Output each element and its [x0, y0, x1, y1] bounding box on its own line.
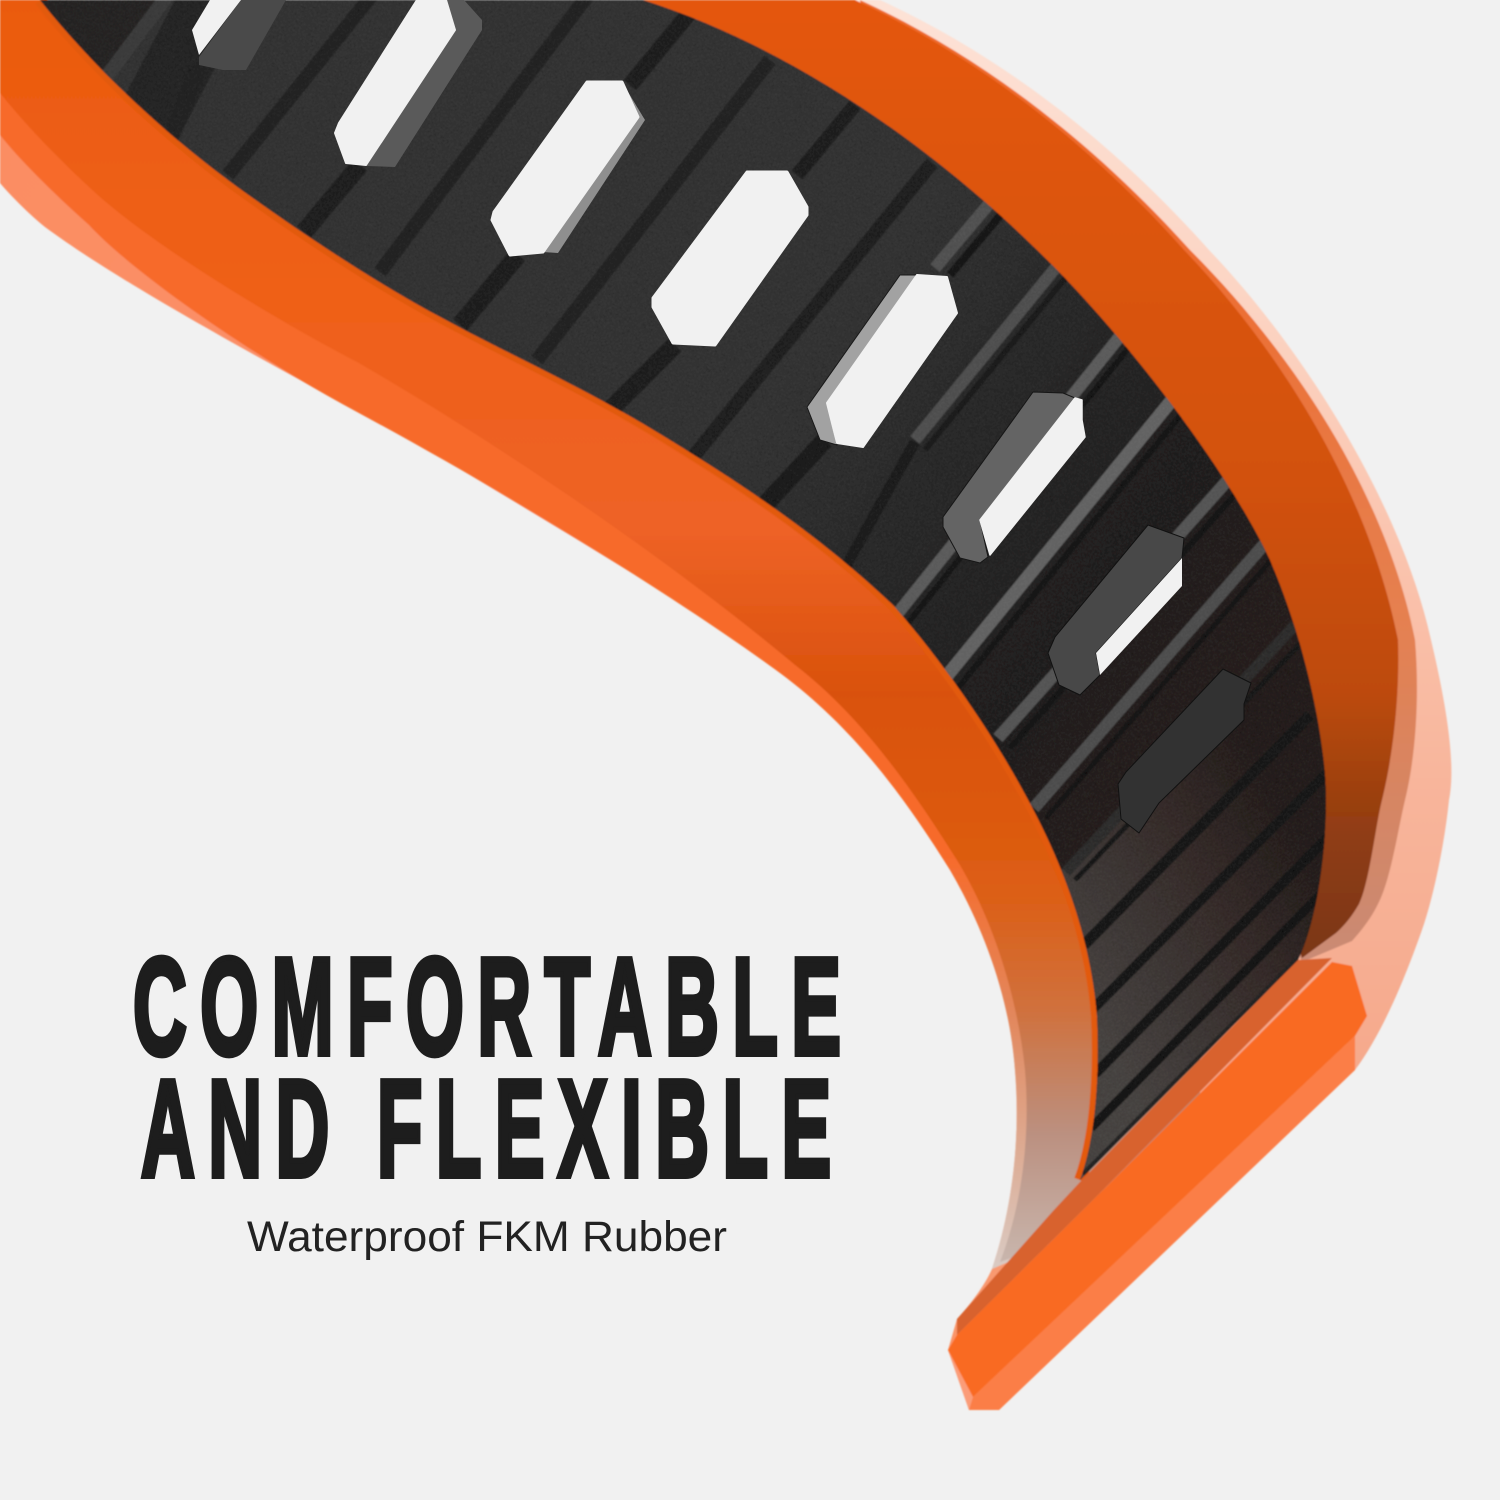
strap lower-left band	[0, 0, 1200, 1269]
upper rim pink bevel	[860, 0, 1417, 962]
strap lower-left pale edge	[0, 130, 780, 673]
black inner band with ribs	[0, 0, 1400, 1200]
heading	[133, 931, 841, 1206]
hole 8	[1118, 669, 1251, 833]
hole 7	[1048, 525, 1184, 695]
inner lip bright orange	[40, 0, 1098, 1180]
tail end chamfer	[948, 1350, 973, 1410]
upper rim main orange	[640, 0, 1398, 958]
tail lower bevel	[969, 1036, 1355, 1410]
heading line 1: COMFORTABLE	[133, 931, 841, 1084]
subheading: Waterproof FKM Rubber	[247, 1213, 727, 1261]
hole 2	[335, 0, 482, 167]
far-left dark section	[40, 0, 154, 71]
strap tail	[948, 958, 1367, 1410]
strap lower-left main face	[0, 0, 1200, 1262]
tail upper face	[957, 958, 1332, 1335]
heading line 2: AND FLEXIBLE	[141, 1053, 831, 1206]
hole 4	[653, 172, 807, 345]
hole 6	[943, 392, 1085, 563]
far-left rib section	[125, 0, 232, 138]
inner band base	[0, 0, 1400, 1200]
rubber grain texture	[40, 0, 1326, 1174]
lower brown ribs	[1060, 658, 1326, 1179]
hole 3	[492, 82, 645, 255]
lower groove lines	[1066, 625, 1330, 1176]
hole 5	[807, 275, 957, 447]
left ribs and grooves	[98, 0, 932, 568]
strap holes	[192, 0, 1251, 833]
tail bright face	[948, 962, 1367, 1397]
hole 1	[192, 0, 286, 70]
right light stripes and dark grooves	[894, 185, 1280, 818]
